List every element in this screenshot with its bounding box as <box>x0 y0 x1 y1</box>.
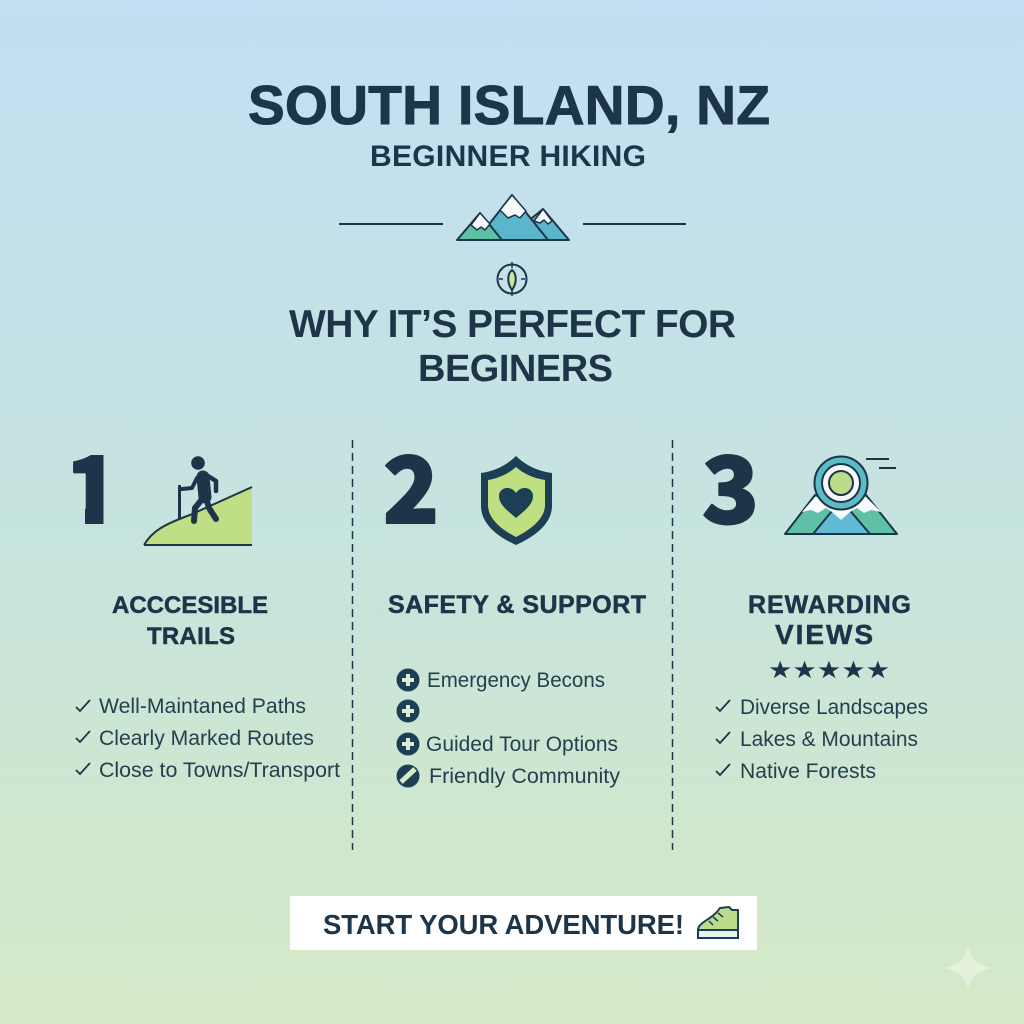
checklist: Native Forests <box>740 760 876 783</box>
list text: Emergency Becons <box>427 669 605 692</box>
number 2: 2 <box>383 417 439 550</box>
list text: Guided Tour Options <box>426 733 618 756</box>
checklist: Well-Maintaned Paths <box>99 695 306 718</box>
checklist: Lakes & Mountains <box>740 728 918 751</box>
heading: SAFETY & SUPPORT <box>388 591 646 619</box>
icon: mountains with medal <box>785 456 897 534</box>
call to action button <box>290 896 757 950</box>
checklist <box>76 695 340 782</box>
panel: accessible trails <box>73 455 340 782</box>
checklist: Clearly Marked Routes <box>99 727 314 750</box>
title: SOUTH ISLAND, NZ <box>248 74 770 136</box>
subtitle: BEGINNER HIKING <box>370 140 646 173</box>
section heading: BEGINERS <box>418 348 613 390</box>
number 3: 3 <box>702 417 759 550</box>
panel: rewarding views <box>702 417 928 783</box>
icon: list bullets <box>396 668 420 788</box>
section heading: WHY IT’S PERFECT FOR <box>289 303 736 346</box>
checklist: Close to Towns/Transport <box>99 759 340 782</box>
dashed divider right <box>672 440 674 850</box>
heading <box>748 591 911 650</box>
button label: START YOUR ADVENTURE! <box>323 909 684 940</box>
heading: TRAILS <box>147 623 235 650</box>
heading: VIEWS <box>775 619 873 650</box>
panel: safety and support <box>383 417 646 788</box>
heading <box>112 592 268 650</box>
checklist: Diverse Landscapes <box>740 696 928 719</box>
heading: REWARDING <box>748 591 911 619</box>
section heading <box>289 303 736 390</box>
icon: shield with heart <box>481 456 552 545</box>
icon: hiking boot <box>698 907 738 938</box>
icon: compass <box>498 262 526 296</box>
dashed divider left <box>352 440 354 850</box>
sparkle mark <box>944 946 992 990</box>
five stars: ★★★★★ <box>768 656 890 684</box>
heading: ACCCESIBLE <box>112 592 268 619</box>
number 1: 1 <box>65 417 121 550</box>
list text <box>426 669 621 788</box>
icon: mountains with side rules <box>339 195 686 240</box>
checklist <box>716 696 928 783</box>
icon: hiker on slope <box>144 456 252 545</box>
list text: Friendly Community <box>429 765 621 788</box>
